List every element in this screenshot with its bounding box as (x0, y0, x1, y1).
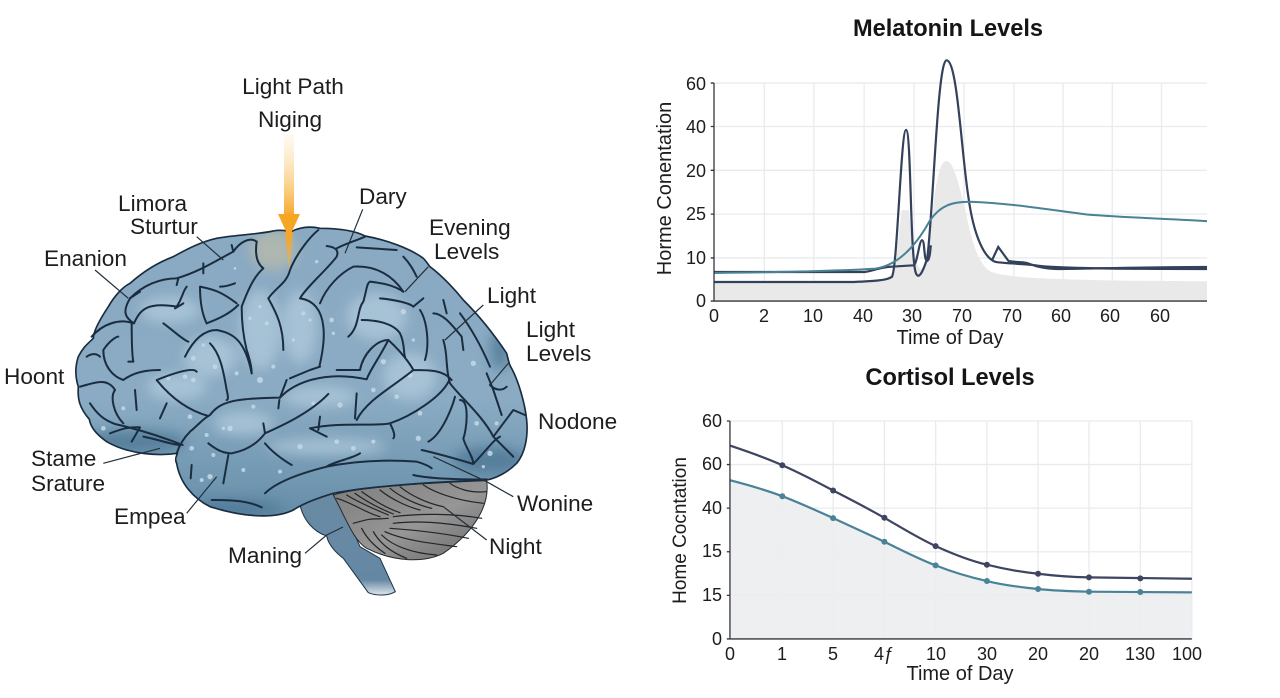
cortex outline (76, 227, 527, 516)
label: Night (443, 507, 542, 559)
label: Limora Sturtur: Sturtur (130, 214, 198, 239)
line chart: cortisol: 10 (926, 644, 946, 664)
label: Light (445, 283, 537, 340)
line chart: melatonin: 25 (686, 204, 706, 224)
brain cortex (76, 227, 527, 516)
label: Light Levels: Light (526, 317, 576, 342)
label: Empea: Empea (114, 504, 186, 529)
sulci folds (80, 230, 525, 507)
line chart: cortisol: 1 (777, 644, 787, 664)
label: Limora Sturtur (118, 191, 223, 260)
label: Evening Levels: Evening (429, 215, 511, 240)
label: Night: Night (489, 534, 542, 559)
label: Light Levels: Levels (526, 341, 591, 366)
label: Light Levels (490, 317, 591, 385)
line chart: cortisol: 60 (702, 411, 722, 431)
line chart: melatonin: 70 (952, 306, 972, 326)
line chart: cortisol: 0 (712, 629, 722, 649)
line chart: melatonin: 0 (709, 306, 719, 326)
cortex shading (80, 230, 527, 517)
brainstem (300, 493, 395, 595)
label: Evening Levels: Levels (434, 239, 499, 264)
label: Empea (114, 477, 217, 529)
label: Dary (345, 184, 407, 253)
label: Evening Levels (405, 215, 511, 292)
line chart: cortisol: 4ƒ (874, 644, 894, 664)
label: Wonine: Wonine (517, 491, 593, 516)
line chart: cortisol: Time of Day (906, 663, 1014, 685)
label: Light: Light (487, 283, 537, 308)
label: Enanion: Enanion (44, 246, 127, 271)
line chart: cortisol (670, 411, 1202, 685)
data points: lower series (779, 493, 1143, 595)
line chart: melatonin: 30 (902, 306, 922, 326)
heading: Melatonin Levels: Melatonin Levels (853, 16, 1043, 42)
line chart: melatonin (654, 60, 1207, 349)
panel: brain diagram (4, 74, 617, 595)
line chart: melatonin: Time of Day (896, 327, 1004, 349)
line chart: melatonin: 0 (696, 291, 706, 311)
line chart: cortisol: 60 (702, 454, 722, 474)
label: Wonine (433, 457, 593, 516)
label: Stame Srature: Srature (31, 471, 105, 496)
line chart: cortisol: 5 (828, 644, 838, 664)
line chart: melatonin: 60 (1150, 306, 1170, 326)
label: Dary: Dary (359, 184, 407, 209)
arrow: light path (278, 135, 300, 271)
panel: cortisol chart (670, 365, 1202, 685)
label: Hoont: Hoont (4, 364, 65, 389)
line chart: cortisol: 130 (1125, 644, 1155, 664)
label: Limora Sturtur: Limora (118, 191, 187, 216)
label: Maning: Maning (228, 543, 302, 568)
line chart: cortisol: 15 (702, 585, 722, 605)
line chart: cortisol: 100 (1172, 644, 1202, 664)
icon: brain illustration (76, 227, 527, 595)
line chart: cortisol: 40 (702, 498, 722, 518)
label: Stame Srature (31, 446, 160, 496)
surface speckles (101, 260, 499, 482)
line chart: cortisol: 20 (1079, 644, 1099, 664)
label: Nodone: Nodone (538, 409, 617, 434)
label: Light Path: Light Path (242, 74, 344, 99)
label: Stame Srature: Stame (31, 446, 96, 471)
line chart: melatonin: 60 (686, 74, 706, 94)
line chart: melatonin: 10 (803, 306, 823, 326)
line chart: melatonin: 40 (686, 117, 706, 137)
cerebellum (333, 481, 487, 560)
line chart: melatonin: 10 (686, 248, 706, 268)
line chart: melatonin: 60 (1100, 306, 1120, 326)
line chart: melatonin: 70 (1002, 306, 1022, 326)
data points: upper series (779, 462, 1143, 581)
label: Enanion (44, 246, 128, 298)
line chart: cortisol: 0 (725, 644, 735, 664)
heading: Cortisol Levels: Cortisol Levels (865, 365, 1035, 391)
line chart: melatonin: Horme Conentation (654, 102, 676, 275)
line chart: melatonin: 20 (686, 161, 706, 181)
line chart: cortisol: 30 (977, 644, 997, 664)
line chart: cortisol: 20 (1028, 644, 1048, 664)
panel: melatonin chart (654, 16, 1207, 349)
line chart: melatonin: 2 (759, 306, 769, 326)
line chart: cortisol: 15 (702, 541, 722, 561)
label: Maning (228, 527, 343, 568)
line chart: melatonin: 60 (1051, 306, 1071, 326)
label: Niging: Niging (258, 107, 322, 132)
line chart: melatonin: 40 (853, 306, 873, 326)
line chart: cortisol: Home Cocntation (670, 457, 691, 604)
